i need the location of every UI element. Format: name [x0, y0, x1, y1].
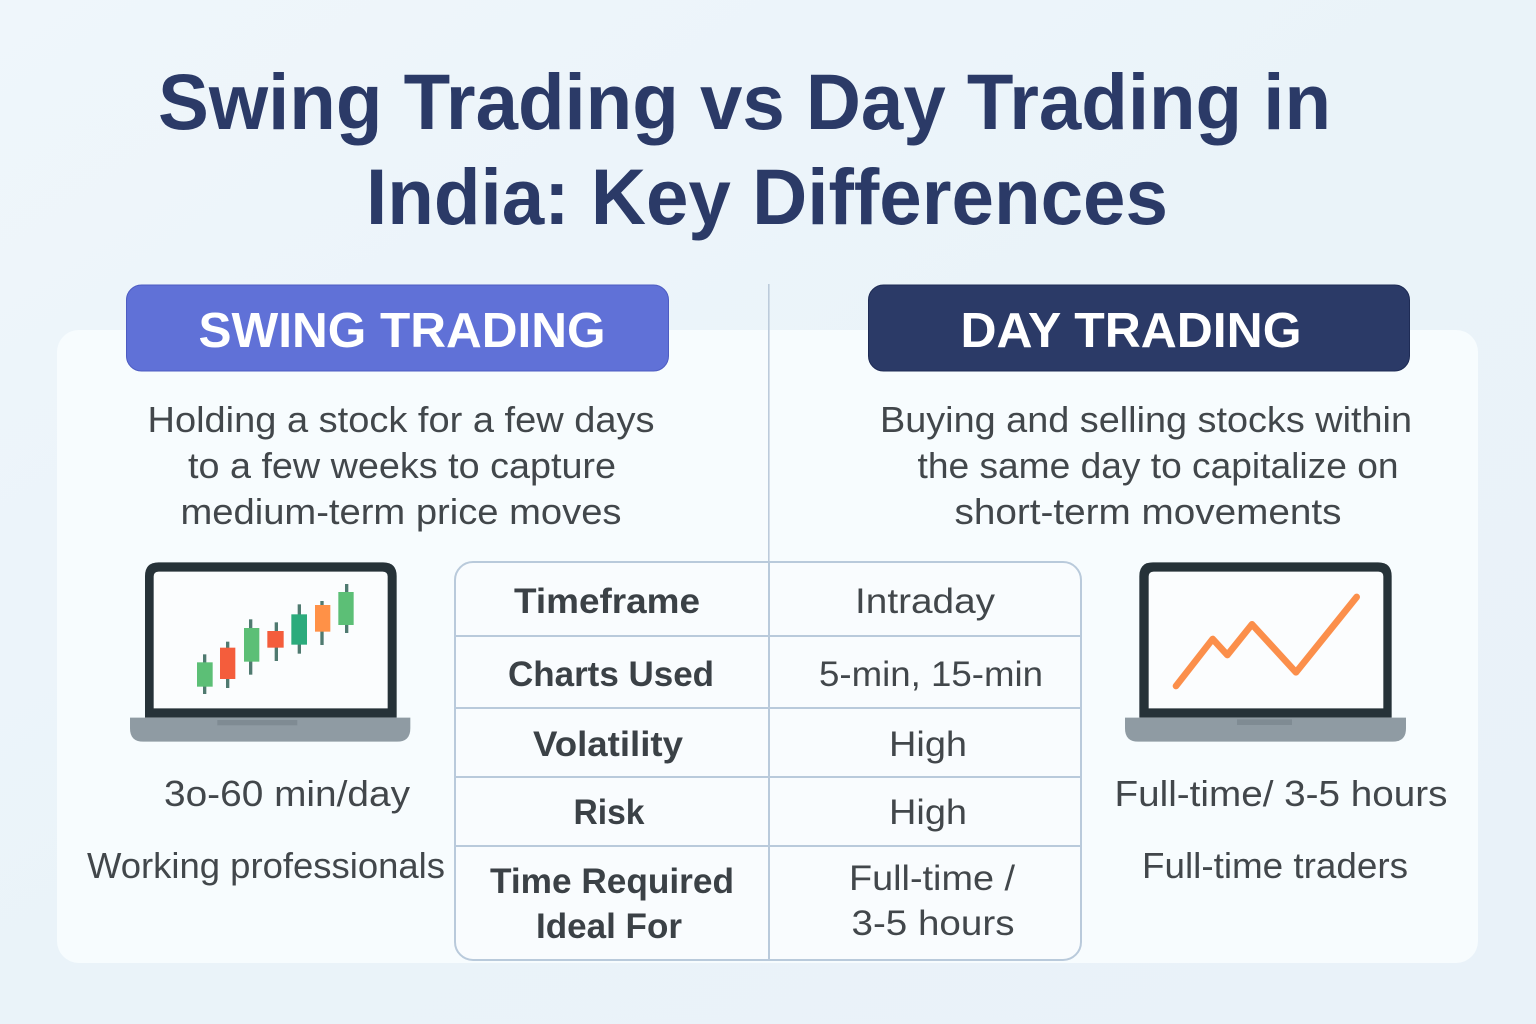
day trading description [880, 399, 1412, 532]
title: India: Key Differences [366, 152, 1168, 241]
row: charts used: Charts Used [508, 655, 714, 694]
row: time required and ideal for: 3-5 hours [852, 904, 1014, 943]
row: timeframe: Intraday [855, 582, 996, 621]
day trading time: Full-time/ 3-5 hours [1114, 773, 1448, 814]
row: charts used: 5-min, 15-min [819, 655, 1043, 694]
icon: laptop with line chart [1125, 562, 1406, 742]
candlesticks [197, 584, 354, 694]
content panel [57, 330, 1478, 963]
header: day trading: DAY TRADING [960, 304, 1302, 358]
row: time required and ideal for: Ideal For [536, 907, 682, 946]
day trading audience: Full-time traders [1142, 845, 1408, 886]
day trading description: the same day to capitalize on [918, 445, 1398, 486]
header: day trading [868, 285, 1410, 371]
swing trading audience: Working professionals [87, 845, 445, 886]
center divider [768, 284, 770, 561]
title [158, 57, 1331, 241]
row: charts used [508, 655, 1043, 694]
row: timeframe: Timeframe [514, 582, 700, 621]
day trading description: Buying and selling stocks within [880, 399, 1412, 440]
swing trading description: Holding a stock for a few days [148, 399, 654, 440]
line chart [1176, 597, 1357, 686]
row: volatility: Volatility [533, 725, 684, 764]
row: volatility [533, 725, 967, 764]
row: risk: High [889, 793, 967, 832]
title: Swing Trading vs Day Trading in [158, 57, 1331, 146]
row: time required and ideal for [490, 859, 1015, 946]
swing trading description [148, 399, 654, 532]
icon: laptop with candlestick chart [130, 562, 410, 742]
swing trading time: 3o-60 min/day [164, 773, 410, 814]
header: swing trading [126, 285, 668, 371]
comparison table [455, 562, 1081, 960]
row: timeframe [514, 582, 996, 621]
row: time required and ideal for: Time Required [490, 862, 734, 901]
header: swing trading: SWING TRADING [198, 304, 606, 358]
day trading description: short-term movements [954, 491, 1342, 532]
row: risk [574, 793, 967, 832]
row: volatility: High [889, 725, 967, 764]
row: risk: Risk [574, 793, 645, 832]
row: time required and ideal for: Full-time / [849, 859, 1015, 898]
swing trading description: medium-term price moves [180, 491, 622, 532]
swing trading description: to a few weeks to capture [188, 445, 616, 486]
